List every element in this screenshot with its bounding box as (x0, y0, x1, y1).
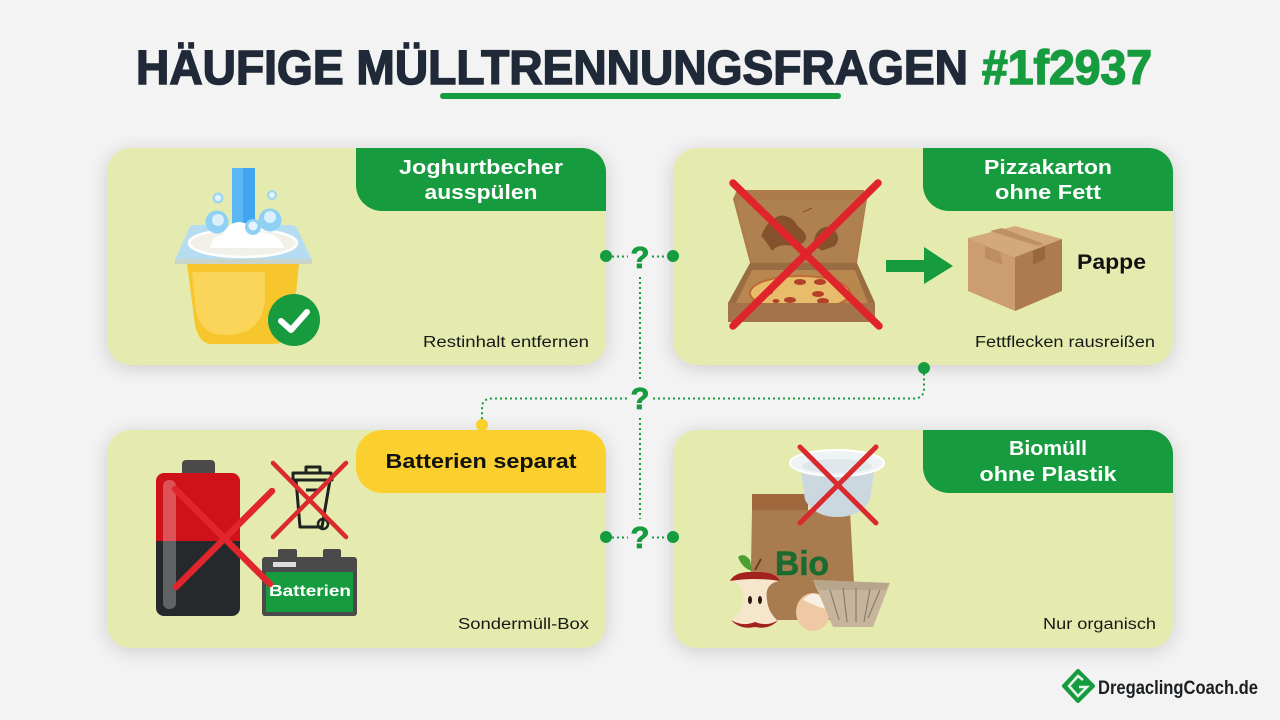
icon: coffee filter (813, 580, 890, 627)
icon: check mark (268, 294, 320, 346)
title: HÄUFIGE MÜLLTRENNUNGSFRAGEN (136, 42, 968, 95)
icon: plastic bowl crossed out (790, 447, 884, 523)
logo: DregaclingCoach.de (1098, 678, 1258, 699)
heading tab: Joghurtbecher: Joghurtbecher (399, 157, 563, 179)
icon: cardboard box (968, 226, 1062, 311)
icon: car battery: Batterien (269, 583, 351, 600)
question mark: bottom: ? (631, 520, 649, 555)
connector nodes (476, 250, 930, 543)
connector: central dotted lines (482, 256, 924, 538)
panel: Biomüll (673, 430, 1173, 648)
label: Pappe: Pappe (1077, 251, 1146, 274)
heading tab: Biomüll: ohne Plastik (980, 464, 1118, 486)
panel: Joghurtbecher (107, 148, 606, 365)
icon: yoghurt cup under water (175, 168, 320, 346)
caption: Restinhalt entfernen: Restinhalt entfernen (423, 334, 589, 351)
heading tab: Biomüll: Biomüll (1009, 438, 1087, 460)
caption: Sondermüll-Box: Sondermüll-Box (458, 616, 589, 633)
icon: battery (156, 460, 240, 616)
icon: bio paper bag: Bio (775, 545, 829, 583)
heading tab: Batterien (356, 430, 606, 493)
caption: Nur organisch: Nur organisch (1043, 616, 1156, 633)
arrow (886, 247, 953, 284)
panel: Batterien (107, 430, 606, 648)
panel: Pizzakarton (673, 148, 1173, 365)
title: #1f2937 (982, 42, 1152, 95)
title underline (443, 93, 838, 99)
question mark: centre: ? (631, 381, 649, 416)
heading tab: Pizzakarton: ohne Fett (995, 182, 1101, 204)
red cross over battery (175, 489, 272, 587)
icon: apple core (730, 555, 780, 628)
icon: bio paper bag (750, 494, 856, 620)
heading tab: Biomüll (923, 430, 1173, 493)
icon: greasy pizza box crossed out (728, 183, 879, 326)
heading tab: Joghurtbecher (356, 148, 606, 211)
heading tab: Joghurtbecher: ausspülen (424, 182, 538, 204)
question mark: top: ? (631, 240, 649, 275)
logo (1064, 671, 1258, 701)
icon: car battery (262, 549, 357, 616)
heading tab: Pizzakarton: Pizzakarton (984, 157, 1112, 179)
caption: Fettflecken rausreißen: Fettflecken rausreißen (975, 334, 1155, 351)
icon: egg shell (796, 593, 830, 631)
heading tab: Batterien: Batterien separat (386, 451, 577, 473)
heading tab: Pizzakarton (923, 148, 1173, 211)
icon: trash bin crossed out (273, 463, 346, 537)
